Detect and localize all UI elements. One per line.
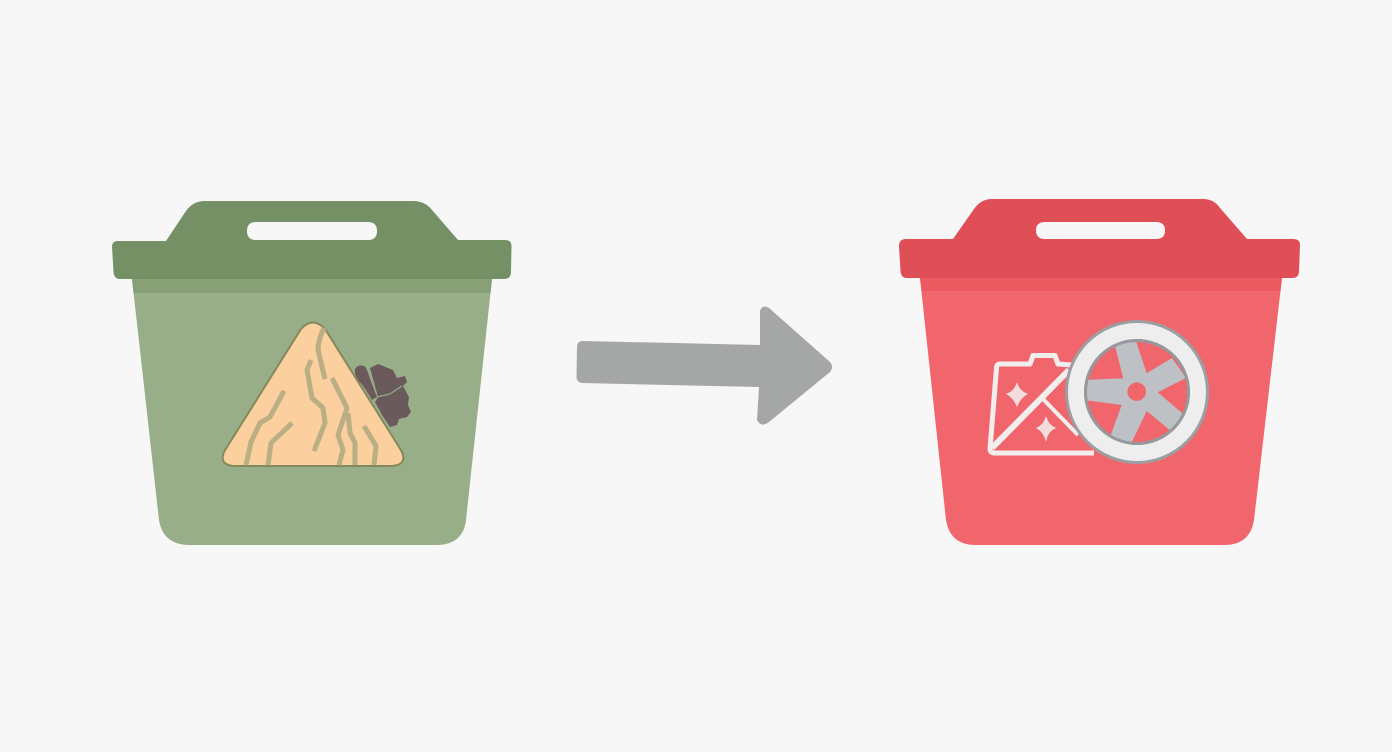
wheel spokes — [1084, 338, 1186, 446]
icon: sand cracks — [246, 328, 376, 465]
icon: sand triangle — [223, 322, 403, 466]
panel: green bin — [112, 201, 512, 545]
red bin shadow band — [920, 278, 1282, 291]
green bin shadow band — [132, 279, 492, 293]
green bin body — [132, 279, 492, 545]
battery diagonals — [992, 370, 1069, 448]
wheel rim edge — [1086, 340, 1188, 444]
icon: star upper — [1007, 383, 1027, 406]
icon: star lower — [1037, 417, 1055, 440]
wheel tyre — [1075, 330, 1199, 454]
battery inner diagonal — [1043, 399, 1078, 435]
green bin lid — [112, 201, 512, 279]
icon: battery with stars — [990, 356, 1094, 453]
wheel tyre outer edge — [1066, 322, 1208, 462]
red bin body — [920, 278, 1282, 545]
panel: red bin — [899, 199, 1300, 545]
arrow — [576, 307, 832, 425]
battery outline — [990, 356, 1094, 453]
red bin lid — [899, 199, 1300, 278]
icon: wheel — [1066, 322, 1208, 462]
icon: dark rocks — [355, 364, 411, 427]
icon: sand pile with rocks — [223, 322, 411, 466]
